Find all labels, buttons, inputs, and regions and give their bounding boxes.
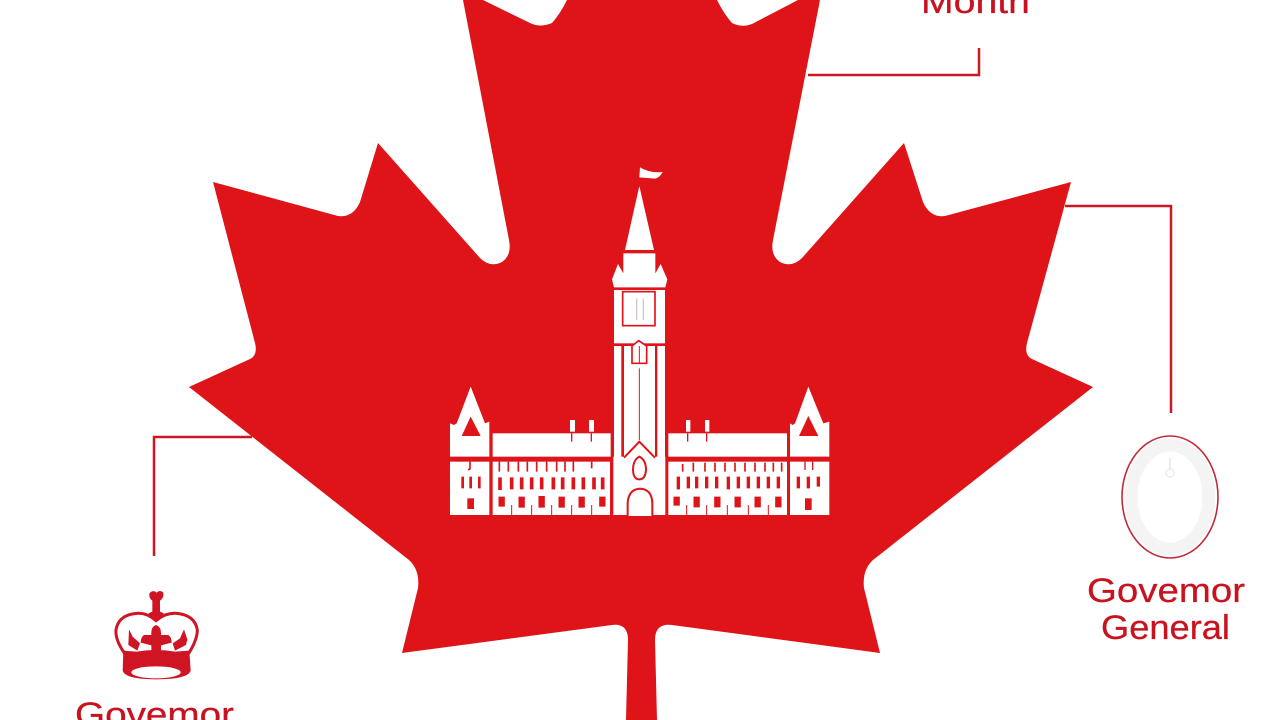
icon: parliament building — [450, 167, 829, 516]
icon: crown — [116, 591, 197, 679]
crown arches — [116, 613, 197, 654]
label: Govemor General — [1087, 572, 1245, 647]
maple leaf — [189, 0, 1093, 720]
central tower — [612, 186, 667, 458]
left wing — [493, 420, 611, 515]
label: Govemor General: General — [1101, 609, 1230, 647]
connector: top label to leaf — [808, 48, 979, 75]
label: Govemor General: Govemor — [1087, 572, 1245, 610]
central entrance — [613, 442, 665, 516]
icon: oval portrait frame — [1122, 436, 1218, 558]
crown band — [123, 650, 191, 679]
connector: left crown to leaf — [154, 437, 252, 556]
flag — [639, 167, 663, 179]
right turret — [790, 387, 829, 515]
connector: right oval to leaf — [1065, 206, 1171, 413]
right wing — [668, 420, 787, 515]
crown cross — [141, 625, 172, 653]
crown finial — [148, 591, 164, 621]
left turret — [450, 387, 489, 515]
